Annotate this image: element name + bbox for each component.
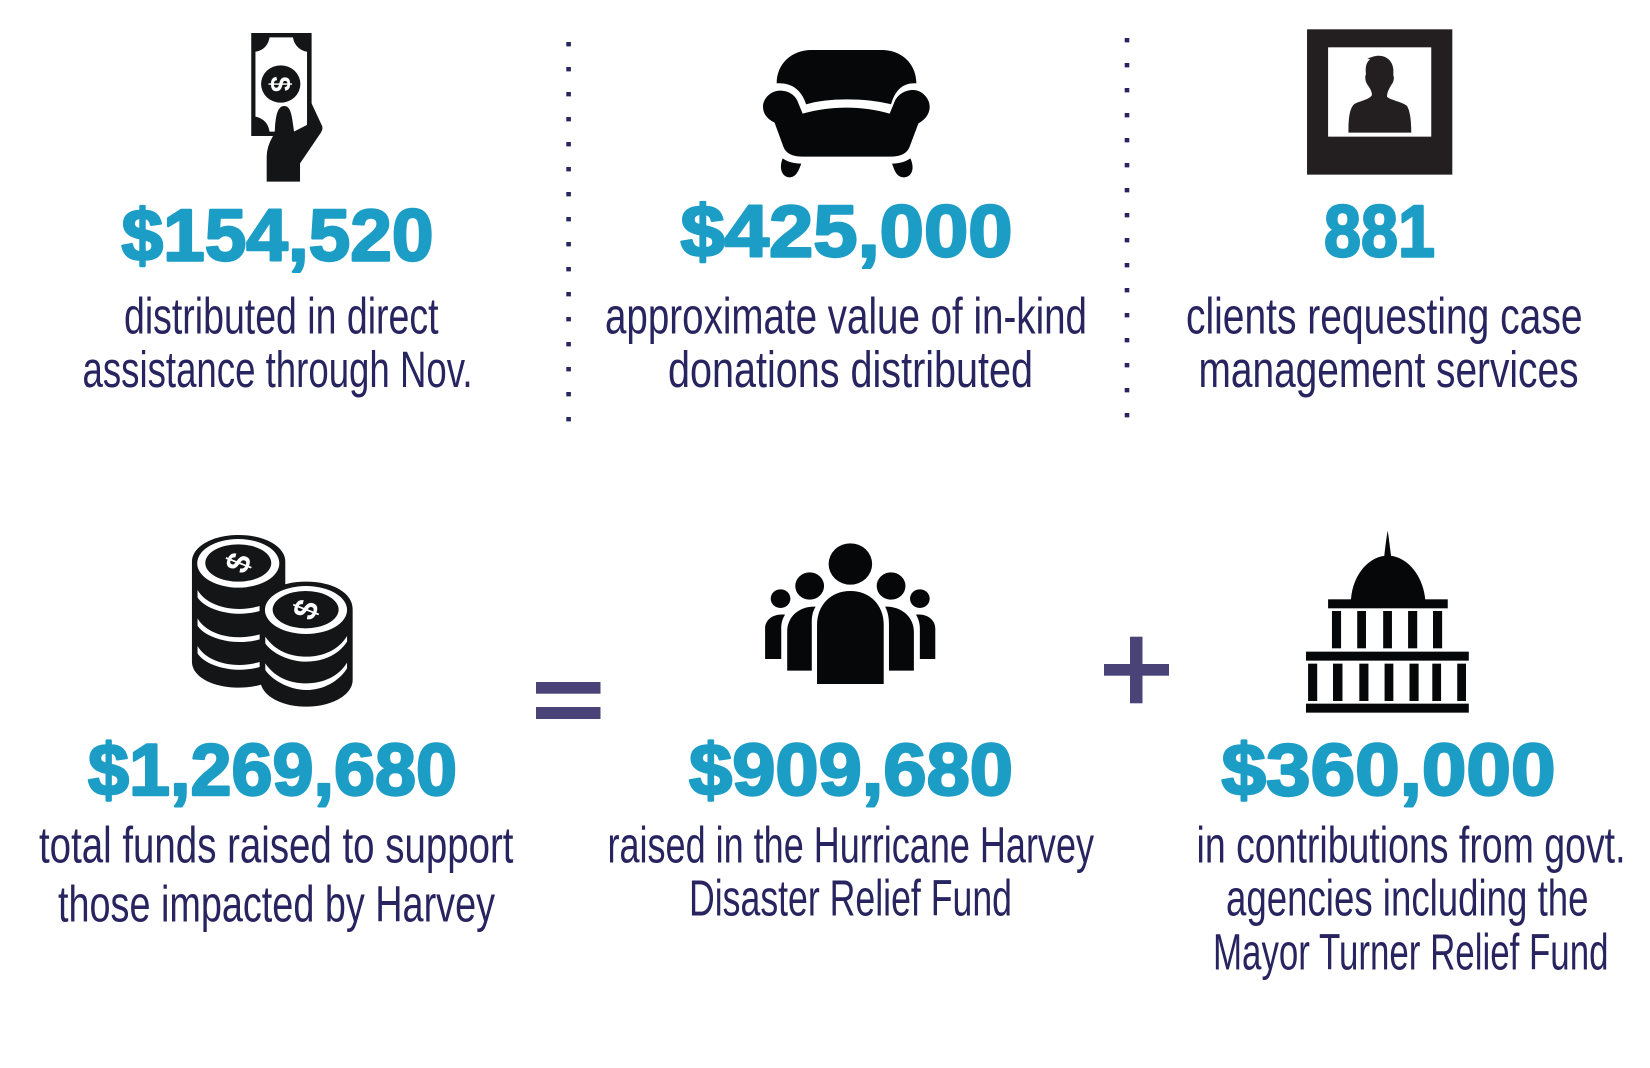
figure: $360,000: $360,000 (1222, 730, 1556, 811)
icon: hand holding banknote: $ (264, 76, 296, 92)
text: government contributions description (1196, 816, 1626, 980)
icon: sofa (763, 50, 930, 177)
text: case management description (1186, 288, 1582, 398)
figure: $909,680: $909,680 (689, 730, 1013, 811)
panel: relief fund (608, 543, 1094, 926)
text: direct assistance description: assistance through Nov. (82, 341, 472, 398)
text: total funds description: those impacted by Harvey (58, 876, 495, 933)
icon: framed portrait (1307, 29, 1452, 175)
text: relief fund description: Disaster Relief Fund (689, 869, 1012, 926)
icon: coin stacks (192, 535, 353, 707)
text: relief fund description: raised in the Hurricane Harvey (608, 816, 1094, 873)
text: relief fund description (608, 816, 1094, 926)
figure: $1,269,680: $1,269,680 (88, 730, 457, 811)
text: in-kind description: approximate value of in-kind (605, 288, 1087, 344)
text: total funds description (39, 816, 514, 933)
operator: plus sign (1104, 637, 1169, 703)
panel: total funds raised (39, 535, 514, 933)
panel: case management clients (1186, 29, 1582, 398)
icon: coin stacks: $ (217, 548, 259, 578)
figure: $154,520: $154,520 (122, 196, 434, 276)
operator: equals sign (536, 682, 600, 719)
figure: 881: 881 (1324, 192, 1435, 272)
panel: government contributions (1196, 531, 1626, 980)
icon: coin stacks: $ (284, 594, 327, 624)
panel: in-kind donations (605, 50, 1087, 398)
text: in-kind description (605, 288, 1087, 398)
icon: hand holding banknote (251, 33, 322, 182)
icon: capitol building (1306, 531, 1469, 713)
figure: $425,000: $425,000 (680, 192, 1012, 272)
panel: direct assistance (82, 33, 472, 398)
text: direct assistance description (82, 288, 472, 398)
text: direct assistance description: distributed in direct (124, 288, 438, 344)
text: in-kind description: donations distributed (668, 341, 1033, 398)
text: total funds description: total funds raised to support (39, 816, 514, 873)
icon: group of people (765, 543, 935, 684)
